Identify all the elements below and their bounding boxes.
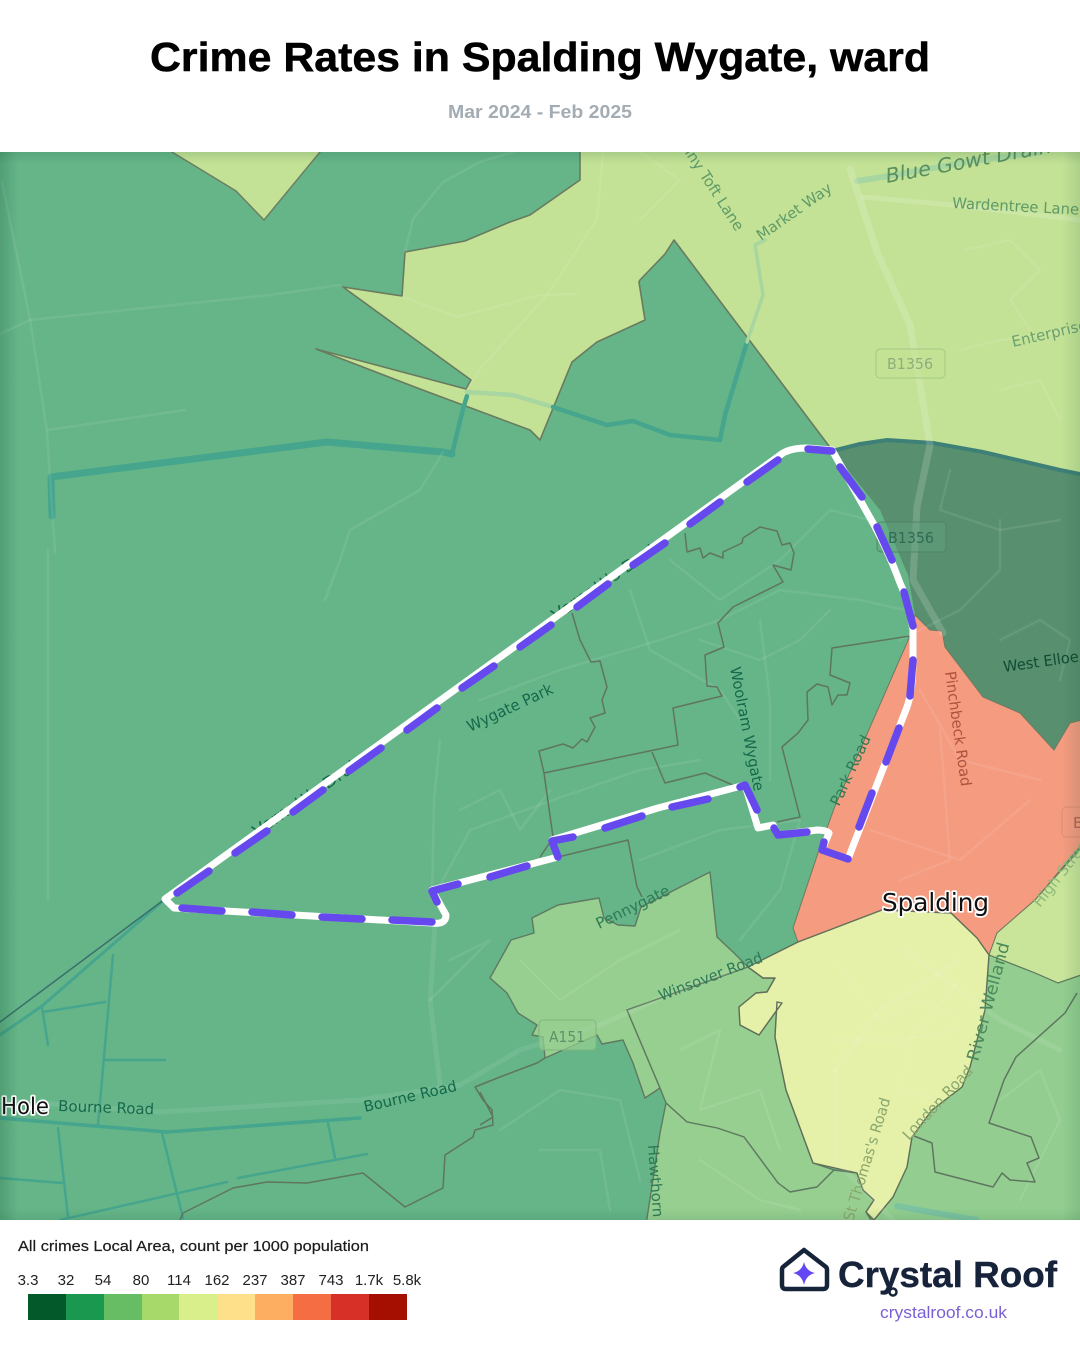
label: Blue Gowt Drain: Blue Gowt Drain bbox=[884, 134, 1053, 188]
road shield: B1356 north: B1356 bbox=[887, 355, 933, 373]
label: Vernatt's Drain south: Vernatt's Drain bbox=[249, 750, 369, 840]
label: Hawthorn: Hawthorn Road bbox=[644, 1144, 670, 1260]
road shield: A151 bbox=[539, 1020, 596, 1050]
legend title: All crimes Local Area, count per 1000 population bbox=[18, 1239, 369, 1255]
road network bbox=[0, 152, 1080, 1220]
label: Bourne Road west: Bourne Road bbox=[58, 1097, 154, 1118]
title: Crime Rates in Spalding Wygate, ward bbox=[150, 34, 930, 80]
label: St Thomas's Road: St Thomas's Road bbox=[840, 1095, 894, 1223]
map labels bbox=[58, 125, 1080, 1260]
legend tick labels: 1.7k bbox=[355, 1272, 384, 1289]
label: Park Road: Park Road bbox=[826, 732, 875, 809]
legend tick labels: 162 bbox=[204, 1272, 230, 1289]
area: Pennygate mid green bbox=[490, 872, 748, 1098]
label: Winsover Road: Winsover Road bbox=[656, 949, 765, 1005]
subtitle: date range: Mar 2024 - Feb 2025 bbox=[448, 101, 632, 122]
area: Winsover mid green bbox=[627, 967, 834, 1192]
ward boundary: Spalding Wygate bbox=[165, 448, 913, 923]
label: Wardentree Lane: Wardentree Lane bbox=[952, 194, 1080, 219]
label: Bourne Road east: Bourne Road bbox=[362, 1077, 458, 1116]
label: Penny Toft Lane: Penny Toft Lane bbox=[668, 125, 748, 234]
label: West Elloe: West Elloe bbox=[1002, 648, 1080, 676]
boundary: purple dashes bbox=[177, 449, 913, 922]
area: north-west wedge bbox=[172, 148, 320, 220]
legend tick labels: 743 bbox=[318, 1272, 344, 1289]
area: St Thomas pale yellow bbox=[739, 910, 989, 1220]
road shield: B1356 centre bbox=[877, 522, 946, 552]
legend tick labels: 80 bbox=[133, 1272, 149, 1289]
boundary: white casing bbox=[165, 448, 913, 923]
legend tick labels bbox=[18, 1272, 422, 1289]
road shield: A151: A151 bbox=[549, 1028, 585, 1046]
ward boundaries inside the green area bbox=[180, 527, 1077, 1220]
legend bbox=[18, 1239, 422, 1320]
road shield: B1356 centre: B1356 bbox=[888, 529, 934, 547]
road shield: B east edge bbox=[1062, 807, 1080, 837]
label: Market Way: Market Way bbox=[753, 179, 835, 244]
legend tick labels: 32 bbox=[58, 1272, 74, 1289]
label: London Road: London Road bbox=[899, 1062, 977, 1144]
legend tick labels: 237 bbox=[242, 1272, 268, 1289]
place label: Hole: Hole bbox=[1, 1094, 49, 1120]
website link: crystalroof.co.uk bbox=[880, 1304, 1008, 1322]
label: Pennygate: Pennygate bbox=[593, 881, 673, 933]
place label: Spalding: Spalding bbox=[882, 888, 989, 917]
label: Vernatt's Drain north: Vernatt's Drain bbox=[548, 534, 668, 624]
base low-crime area bbox=[0, 152, 1080, 1220]
legend tick labels: 3.3 bbox=[18, 1272, 38, 1289]
legend tick labels: 387 bbox=[280, 1272, 306, 1289]
wordmark: Crystal Roof bbox=[838, 1254, 1058, 1295]
area: north-east light green bbox=[316, 148, 1080, 476]
label: Woolram Wygate: Woolram Wygate bbox=[726, 665, 768, 792]
legend tick labels: 5.8k bbox=[393, 1272, 422, 1289]
water: drains on the west bbox=[0, 152, 1040, 1220]
label: Wygate Park: Wygate Park bbox=[464, 680, 556, 736]
label: River Welland: River Welland bbox=[964, 940, 1014, 1063]
area: south-east mid green bbox=[874, 955, 1080, 1230]
label: Pinchbeck Road: Pinchbeck Road bbox=[941, 670, 975, 787]
legend tick labels: 114 bbox=[167, 1272, 191, 1289]
map edge shading bbox=[0, 152, 1080, 1220]
area: east dark green bbox=[832, 440, 1080, 750]
river: north-east bank bbox=[832, 440, 1080, 476]
road shield: B1356 north bbox=[876, 349, 945, 378]
legend tick labels: 54 bbox=[95, 1272, 111, 1289]
area: Spalding centre salmon bbox=[793, 615, 1080, 955]
logo: Crystal Roof bbox=[782, 1250, 1058, 1322]
area: far-east light green bbox=[989, 838, 1080, 983]
area: south mid green bbox=[646, 1103, 874, 1225]
icon: house with star bbox=[782, 1250, 827, 1289]
icon: key ring on the y bbox=[890, 1288, 896, 1296]
legend colour scale bbox=[28, 1294, 407, 1320]
